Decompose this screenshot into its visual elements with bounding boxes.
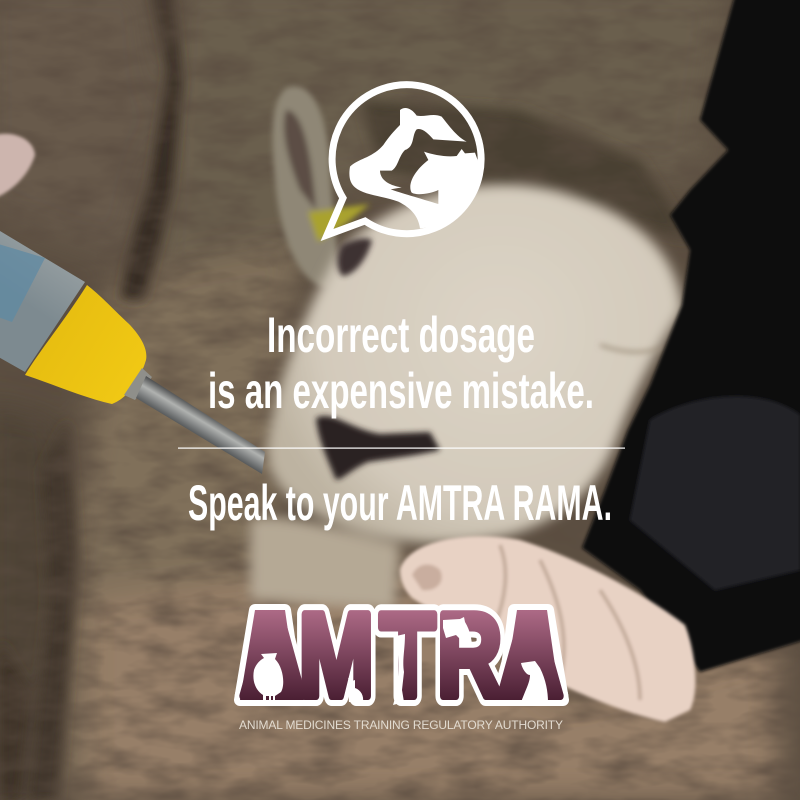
icon: speech bubble with animals [327,85,481,235]
icon: cat [348,678,363,702]
icon: sheep [253,653,283,701]
icon: horse leg [393,634,405,705]
headline: is an expensive mistake. [208,363,594,419]
sheep head [250,184,682,610]
syringe [0,228,265,474]
icon: horse head [443,617,472,647]
sheep ear with tag [273,86,370,288]
AMTRA logo: AMTRA [240,589,563,722]
speech bubble outline [327,85,481,235]
black sleeve [582,0,800,672]
icon: dog [521,661,548,702]
headline [208,307,594,419]
AMTRA logo: AMTRA [240,589,563,722]
cow, cat and dog silhouettes [349,108,480,228]
headline: Incorrect dosage [267,307,535,363]
gloved hand [0,134,695,722]
logo tagline: ANIMAL MEDICINES TRAINING REGULATORY AUTHORITY [239,718,563,732]
